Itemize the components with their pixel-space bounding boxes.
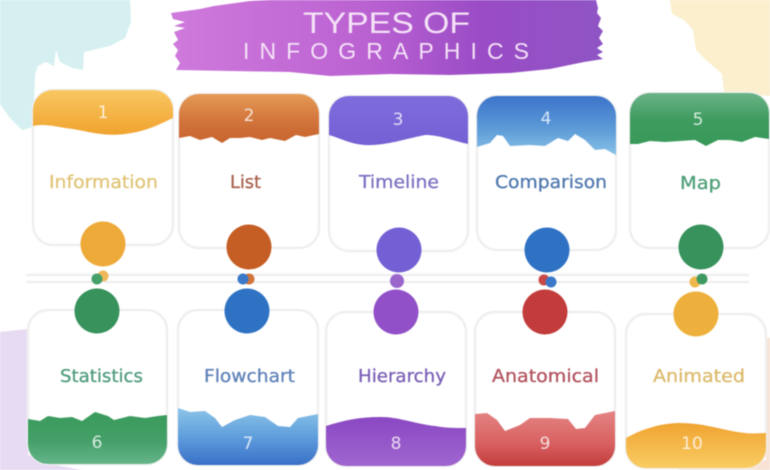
label Information: Information	[49, 173, 158, 193]
background wash: cream top-right	[670, 0, 770, 96]
card 7 footer	[178, 408, 318, 465]
card 3: Timeline	[329, 96, 468, 251]
small connector dots	[92, 270, 708, 288]
card 6 footer	[28, 412, 167, 464]
card 10 footer	[626, 423, 766, 468]
number 7: 7	[243, 434, 253, 454]
timeline line	[27, 275, 748, 282]
number 9: 9	[540, 434, 550, 454]
card 10: Animated	[626, 314, 766, 468]
title text: TYPES OF	[303, 7, 470, 40]
card 1: Information	[33, 90, 173, 245]
label Comparison: Comparison	[495, 173, 607, 193]
number 4: 4	[541, 109, 551, 129]
card 5 header	[630, 93, 769, 146]
background wash: teal top-left	[0, 0, 131, 130]
bottom connector circles	[74, 288, 718, 336]
card 3 header	[329, 96, 468, 145]
number 6: 6	[92, 433, 102, 453]
label List: List	[230, 173, 261, 193]
card 5: Map	[630, 93, 769, 248]
label Hierarchy: Hierarchy	[358, 367, 446, 387]
card 2 header	[179, 94, 319, 143]
card 9 footer	[475, 411, 615, 466]
number 8: 8	[391, 434, 401, 454]
card 7: Flowchart	[178, 310, 318, 465]
card 8: Hierarchy	[326, 312, 466, 466]
number 5: 5	[693, 110, 703, 130]
number 2: 2	[244, 106, 254, 126]
title banner	[171, 0, 603, 76]
brush stroke	[171, 0, 603, 76]
label Timeline: Timeline	[358, 173, 439, 193]
number 3: 3	[393, 110, 403, 130]
card 4: Comparison	[477, 96, 616, 250]
label Statistics: Statistics	[60, 367, 143, 387]
label Animated: Animated	[653, 367, 745, 387]
card 2: List	[179, 94, 319, 248]
label Flowchart: Flowchart	[204, 367, 295, 387]
card 4 header	[477, 96, 616, 155]
number 10: 10	[681, 434, 703, 454]
card 8 footer	[326, 417, 466, 466]
number 1: 1	[98, 103, 108, 123]
top connector circles	[80, 222, 724, 272]
card 1 header	[33, 90, 173, 135]
card 6: Statistics	[28, 310, 167, 464]
background wash: peach bottom-right	[678, 338, 770, 470]
background wash: lilac bottom-left	[0, 329, 82, 470]
card 9: Anatomical	[475, 312, 615, 466]
label Map: Map	[680, 174, 721, 194]
subtitle text: INFOGRAPHICS	[243, 38, 529, 64]
label Anatomical: Anatomical	[492, 367, 599, 387]
